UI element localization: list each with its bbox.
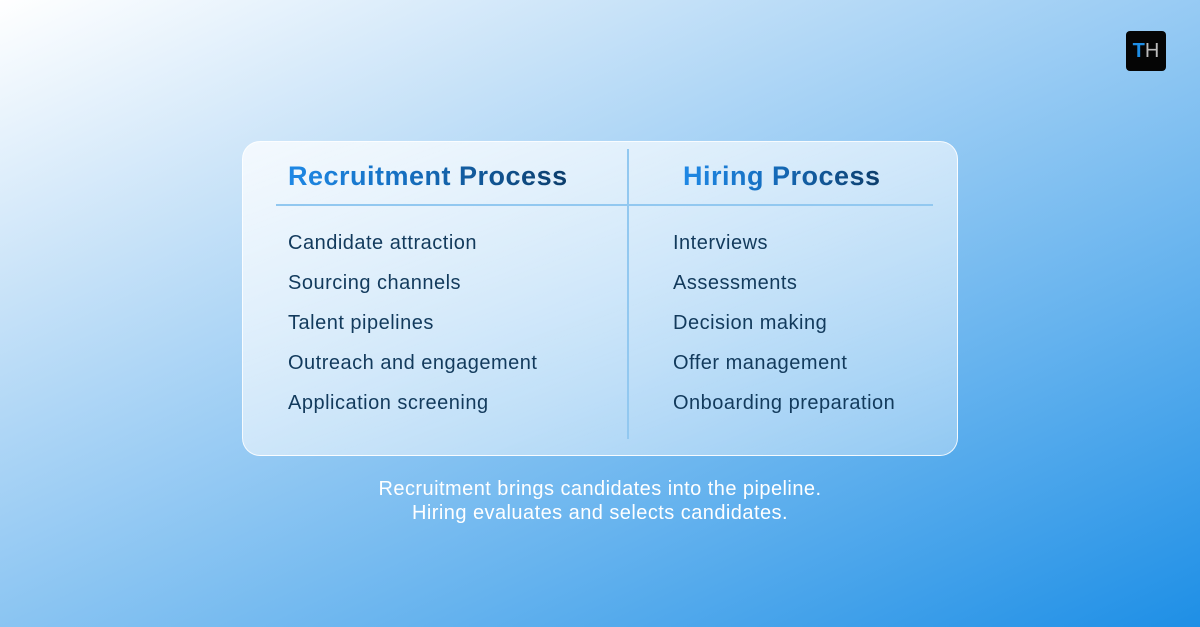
list: recruitment: Candidate attraction (288, 232, 477, 254)
panel: comparison (242, 141, 958, 456)
list: recruitment (288, 232, 537, 414)
logo (1126, 31, 1166, 71)
heading: recruitment: Recruitment Process (288, 161, 568, 191)
list: recruitment: Application screening (288, 392, 489, 414)
list: hiring: Interviews (673, 232, 768, 254)
caption (379, 478, 821, 524)
logo: TH (1133, 40, 1159, 62)
list: hiring (673, 232, 895, 414)
list: hiring: Onboarding preparation (673, 392, 895, 414)
list: hiring: Assessments (673, 272, 797, 294)
list: hiring: Offer management (673, 352, 847, 374)
list: hiring: Decision making (673, 312, 827, 334)
list: recruitment: Talent pipelines (288, 312, 434, 334)
list: recruitment: Sourcing channels (288, 272, 461, 294)
heading: hiring: Hiring Process (683, 161, 881, 191)
caption: Hiring evaluates and selects candidates. (412, 502, 788, 524)
list: recruitment: Outreach and engagement (288, 352, 537, 374)
caption: Recruitment brings candidates into the pipeline. (379, 478, 821, 500)
